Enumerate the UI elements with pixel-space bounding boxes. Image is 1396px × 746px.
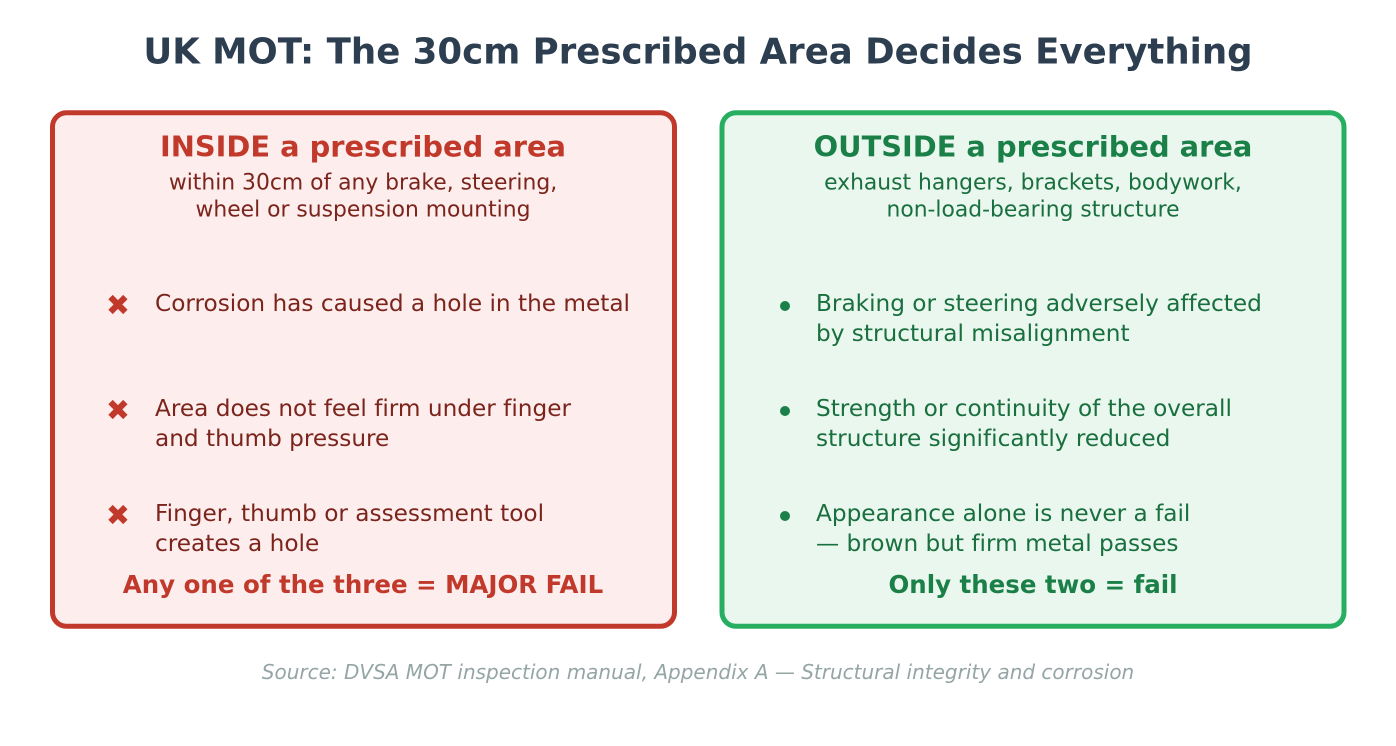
icon: bullet 2 [780,406,790,416]
title: UK MOT: The 30cm Prescribed Area Decides Everything [143,32,1253,73]
subheading: outside: exhaust hangers, brackets, bodywork, [824,171,1242,196]
source note: Source: DVSA MOT inspection manual, Appendix A — Structural integrity and corrosion [262,660,1134,684]
icon: bullet 1 [780,301,790,311]
icon: cross 3: ✖ [106,498,130,532]
verdict: only two: Only these two = fail [888,570,1178,599]
subheading: inside: within 30cm of any brake, steering, [169,171,557,196]
panel: outside prescribed area [722,113,1344,626]
item: hole in metal: Corrosion has caused a hole in the metal [155,290,630,317]
panel: inside prescribed area [52,113,674,626]
item: creates a hole: Finger, thumb or assessment tool [155,500,544,527]
item: strength or continuity: Strength or continuity of the overall [816,395,1232,422]
heading: outside: OUTSIDE a prescribed area [814,130,1252,164]
subheading: inside: wheel or suspension mounting [196,198,530,223]
icon: cross 2: ✖ [106,393,130,427]
heading: inside: INSIDE a prescribed area [160,130,566,164]
item: appearance: — brown but firm metal passes [816,530,1178,557]
icon: bullet 3 [780,511,790,521]
item: braking or steering: by structural misalignment [816,320,1130,347]
item: braking or steering: Braking or steering adversely affected [816,290,1262,317]
item: not firm: and thumb pressure [155,425,389,452]
subheading: outside: non-load-bearing structure [886,198,1180,223]
item: creates a hole: creates a hole [155,530,319,557]
verdict: major fail: Any one of the three = MAJOR FAIL [123,570,603,599]
item: not firm: Area does not feel firm under finger [155,395,571,422]
item: strength or continuity: structure significantly reduced [816,425,1170,452]
icon: cross 1: ✖ [106,288,130,322]
item: appearance: Appearance alone is never a fail [816,500,1190,527]
